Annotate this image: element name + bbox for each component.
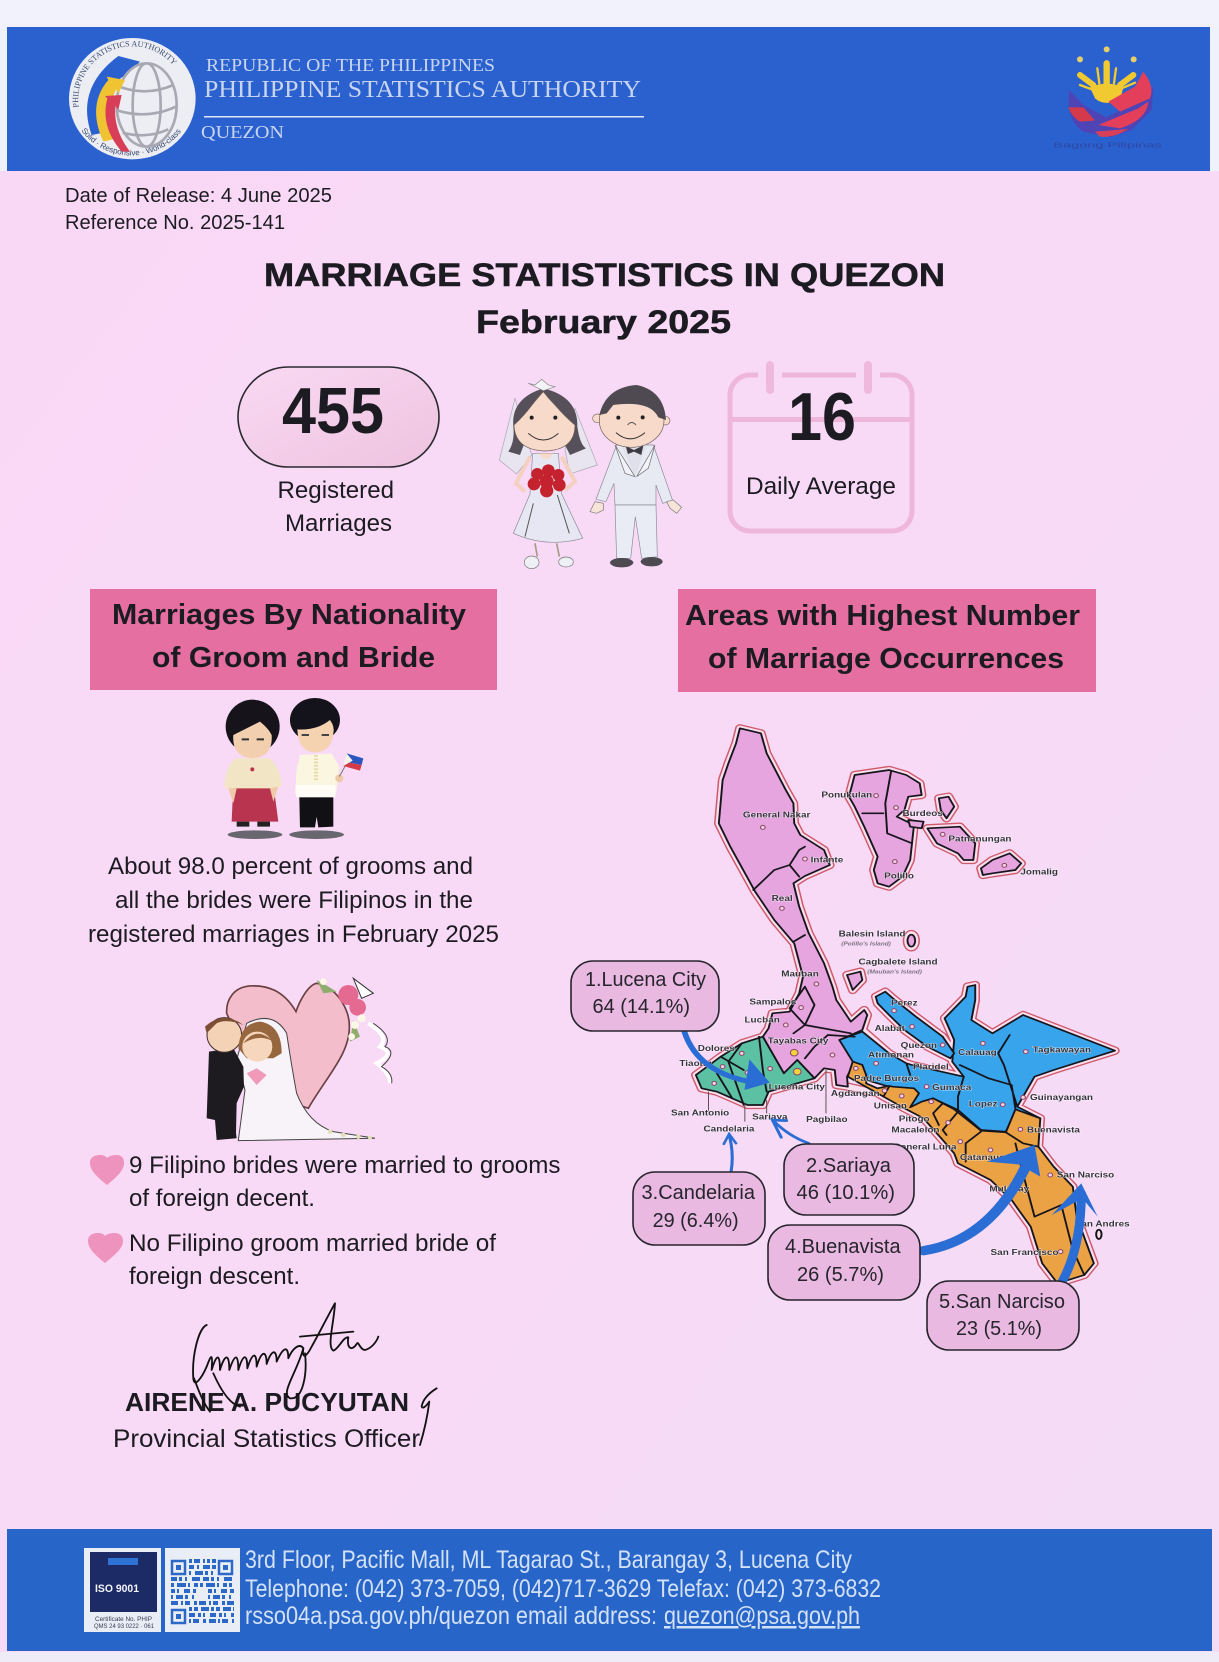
map: town labels: Gumaca [932,1083,972,1092]
map: town labels: Lucban [744,1015,780,1024]
map: town labels: (Mauban's Island) [867,969,922,975]
map: town labels: Pitogo [899,1114,930,1124]
map: town labels: Lucena City [769,1082,826,1091]
map: town labels: Guinayangan [1030,1093,1093,1102]
footer contact text: Telephone: (042) 373-7059, (042)717-3629 Telefax: (042) 373-6832 [245,1575,881,1603]
bride dress [237,1018,375,1141]
map: town labels: Patnanungan [948,834,1012,844]
section heading: areas [678,589,1096,692]
map: town labels: Tiaong [679,1059,712,1068]
map: town labels: Ponukulan [821,790,873,800]
map: town labels: Polillo [884,871,914,880]
map: leader lines [708,1070,826,1122]
top scanner margin [0,0,1219,27]
callout: Lucena City [571,961,719,1031]
header band [7,27,1210,171]
map: town labels: Cagbalete Island [859,957,938,966]
map: town labels: Tagkawayan [1033,1045,1091,1054]
QR code [165,1548,240,1632]
ISO 9001 badge: ISO 9001 [95,1583,139,1595]
stat: daily average calendar: 16 [788,379,856,455]
header: agency name text: QUEZON [201,122,284,142]
map: town labels: Real [772,894,793,903]
header: agency name text [201,55,644,142]
map: town labels: Macalelon [891,1125,940,1135]
ISO 9001 badge [84,1548,161,1632]
map: town labels: Mauban [781,969,819,979]
map: small islet [1096,1230,1102,1239]
map: town labels: Perez [891,998,918,1008]
man with flag [289,698,363,839]
map: town labels: Lopez [969,1099,998,1109]
map: town labels: Sampaloc [749,997,796,1006]
text: nationality summary: registered marriages in February 2025 [88,921,499,948]
section heading: areas: of Marriage Occurrences [708,643,1064,675]
callout: Sariaya [784,1144,914,1215]
map: town labels: San Francisco [991,1248,1059,1257]
map: green municipalities [696,1037,814,1105]
callout: San Narciso: 23 (5.1%) [956,1318,1042,1340]
callout: Buenavista [768,1225,920,1300]
callout: Buenavista: 26 (5.7%) [797,1264,884,1286]
icon: heart [88,1233,123,1263]
icon: Bagong Pilipinas logo [1053,46,1162,149]
callout: Candelaria [633,1172,765,1245]
bullet: Filipino brides [90,1152,560,1212]
bride head [238,1022,282,1062]
heart [227,983,349,1108]
title: February 2025 [476,304,731,340]
section heading: areas: Areas with Highest Number [685,600,1080,632]
bullet: Filipino brides: 9 Filipino brides were married to grooms [129,1152,560,1179]
map: town dots [712,794,1063,1254]
map: pink municipalities [719,728,1021,1087]
map: town labels: Agdangan [831,1089,880,1098]
map: town labels: Plaridel [913,1062,949,1072]
header: agency name text: PHILIPPINE STATISTICS AUTHORITY [204,77,641,103]
callout: Sariaya: 46 (10.1%) [796,1182,895,1204]
footer contact text [245,1546,881,1630]
callout: Lucena City: 1.Lucena City [585,969,706,991]
stat: registered marriages: 455 [282,374,384,447]
footer band [7,1529,1212,1651]
map: municipal borders [717,772,1084,1275]
text: nationality summary: all the brides were Filipinos in the [115,887,473,914]
callout: Sariaya: 2.Sariaya [806,1155,892,1177]
map: town labels: Unisan [874,1101,907,1110]
signature block: AIRENE A. PUCYUTAN [125,1387,409,1417]
release date and reference number [65,185,332,234]
map: town labels: Atimonan [868,1050,914,1059]
map outline halo [696,728,1115,1283]
flowers and ribbon [317,978,392,1083]
text: nationality summary: About 98.0 percent of grooms and [108,853,473,880]
map: town labels: Burdeos [903,809,943,818]
illustration: couple in Filipino attire [225,698,363,839]
signature [193,1303,437,1445]
callout: Candelaria: 3.Candelaria [642,1182,756,1204]
illustration: wedding couple with heart [205,978,392,1141]
ISO 9001 badge: QMS 24 93 0222 · 061 [94,1624,155,1630]
callout: Buenavista: 4.Buenavista [785,1236,901,1258]
callout: Candelaria: 29 (6.4%) [653,1210,739,1232]
signature block [113,1303,437,1453]
map: town labels: Tayabas City [768,1036,829,1045]
map: town labels: Mulanay [989,1184,1030,1194]
map: town labels: Quezon [901,1041,937,1050]
callout: Lucena City: 64 (14.1%) [592,996,690,1018]
release date and reference number: Reference No. 2025-141 [65,212,285,234]
icon: PSA logo: Solid · Responsive · World-class [82,128,181,156]
section heading: nationality: Marriages By Nationality [112,599,466,631]
release date and reference number: Date of Release: 4 June 2025 [65,185,332,207]
arrow: to San Narciso [1052,1183,1098,1282]
section heading: nationality [90,589,497,690]
callout: San Narciso [927,1281,1079,1350]
map: town labels: Candelaria [704,1124,755,1133]
stat: daily average calendar: Daily Average [746,473,896,500]
groom [590,385,682,567]
map: town labels: Balesin Island [839,929,906,939]
illustration: bride and groom [499,379,682,569]
map: town labels: Dolores [698,1044,735,1053]
map: town labels [671,790,1130,1257]
bullet: Filipino grooms: foreign descent. [129,1263,300,1290]
bride [499,379,597,569]
arrow: to Buenavista [924,1145,1040,1251]
map: town labels: General Nakar [743,810,811,819]
signature block: Provincial Statistics Officer [113,1425,420,1453]
map: blue municipalities [839,985,1115,1132]
title: MARRIAGE STATISTISTICS IN QUEZON [264,257,945,293]
footer contact text: 3rd Floor, Pacific Mall, ML Tagarao St., Barangay 3, Lucena City [245,1546,852,1574]
bullet: Filipino brides: of foreign decent. [129,1185,315,1212]
map: town labels: San Narciso [1057,1170,1115,1179]
arrow: to Candelaria [724,1134,736,1172]
map: town labels: Sariaya [752,1112,788,1121]
map: town labels: Pagbilao [806,1115,848,1124]
footer contact text: quezon@psa.gov.ph [664,1602,860,1630]
map: town labels: (Polillo's Island) [841,941,891,948]
map: town labels: Buenavista [1027,1125,1081,1135]
arrow: to Sariaya [772,1120,809,1143]
bullet: Filipino grooms [88,1230,496,1290]
map: town labels: Padre Burgos [854,1074,919,1083]
map: orange municipalities [848,1062,1094,1283]
stat: daily average calendar [730,361,912,531]
woman [225,700,282,839]
section heading: nationality: of Groom and Bride [152,642,435,674]
header side margins [0,27,1219,171]
icon: Bagong Pilipinas logo: Bagong Pilipinas [1053,140,1162,149]
footer contact text: rsso04a.psa.gov.ph/quezon email address: [245,1602,657,1630]
ISO 9001 badge: Certificate No. PHIP [95,1617,152,1623]
bottom scanner margin [0,1652,1219,1662]
map: Quezon province [671,728,1130,1283]
text: nationality summary [88,853,499,948]
map: town labels: San Andres [1075,1219,1130,1229]
icon: PSA logo [69,38,196,160]
map: town labels: San Antonio [671,1108,730,1117]
stat: registered marriages [238,367,439,537]
groom head [205,1018,243,1052]
map: town labels: Jomalig [1020,867,1058,876]
icon: heart [90,1155,124,1185]
map: town labels: Alabat [875,1024,905,1033]
callout: San Narciso: 5.San Narciso [939,1291,1065,1313]
header: agency name text: REPUBLIC OF THE PHILIPPINES [206,55,495,75]
map: town labels: Calauag [958,1048,997,1057]
arrow: to Lucena City [684,1032,770,1090]
stat: registered marriages: Marriages [285,510,392,537]
stat: registered marriages: Registered [278,477,394,504]
groom suit [207,1048,244,1140]
map: town labels: General Luna [893,1142,957,1151]
bouquet [247,1068,267,1085]
bullet: Filipino grooms: No Filipino groom married bride of [129,1230,496,1257]
title [264,257,945,340]
map: town labels: Catanauan [960,1153,1011,1162]
map: town labels: Infante [811,855,843,864]
train flowers [328,1129,372,1140]
icon: PSA logo: PHILIPPINE STATISTICS AUTHORITY [72,41,178,108]
